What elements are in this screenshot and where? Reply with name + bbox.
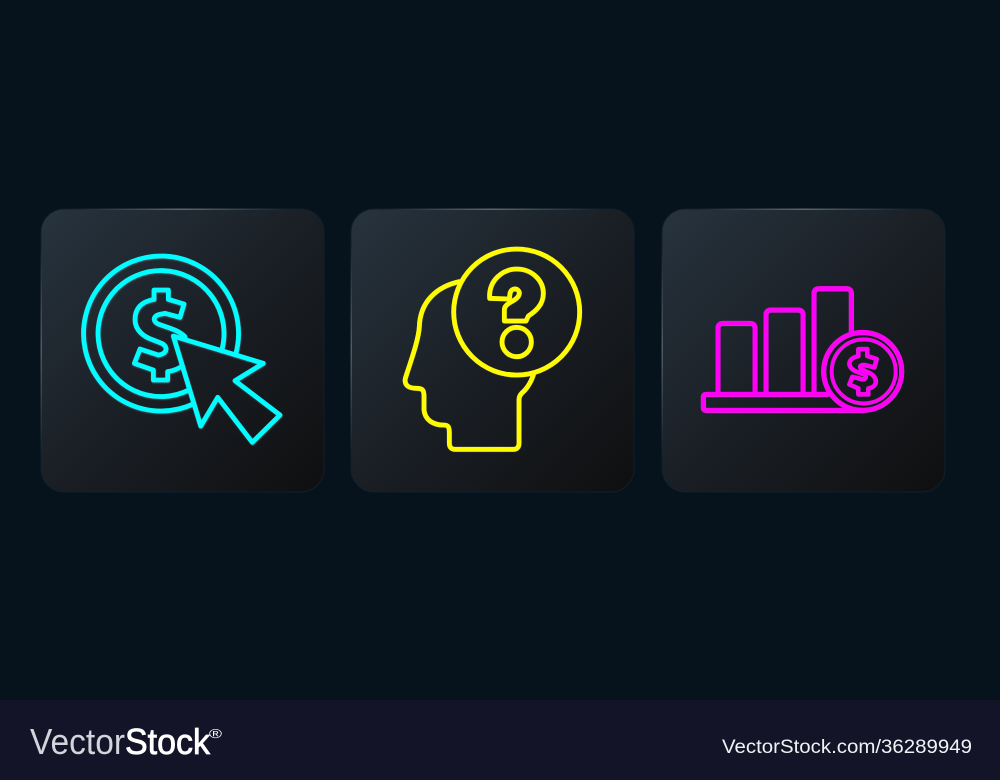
dollar sign [849,349,877,394]
icon: head with question mark [405,249,580,449]
question dot [502,327,531,357]
dollar sign [134,290,185,380]
footer band [0,700,1000,780]
image id text: VectorStock.com/36289949 [722,736,972,758]
logo: VectorStock: Stock [125,721,211,762]
bars [718,289,851,394]
cursor arrow [173,336,280,442]
logo: VectorStock: Vector [30,721,125,762]
icon: dollar coin with cursor arrow [84,256,280,442]
head outline [405,282,533,449]
icon: bar chart with dollar coin [703,289,902,410]
base [703,394,863,410]
panel: bar chart card [662,208,945,492]
logo: VectorStock: ® [209,726,223,741]
coin rings [84,256,239,411]
logo: VectorStock [30,721,223,762]
question mark [490,269,543,321]
panel: dollar click card [40,208,324,492]
coin rings [824,332,902,410]
panel: head question card [350,208,634,492]
thought circle [454,249,580,375]
